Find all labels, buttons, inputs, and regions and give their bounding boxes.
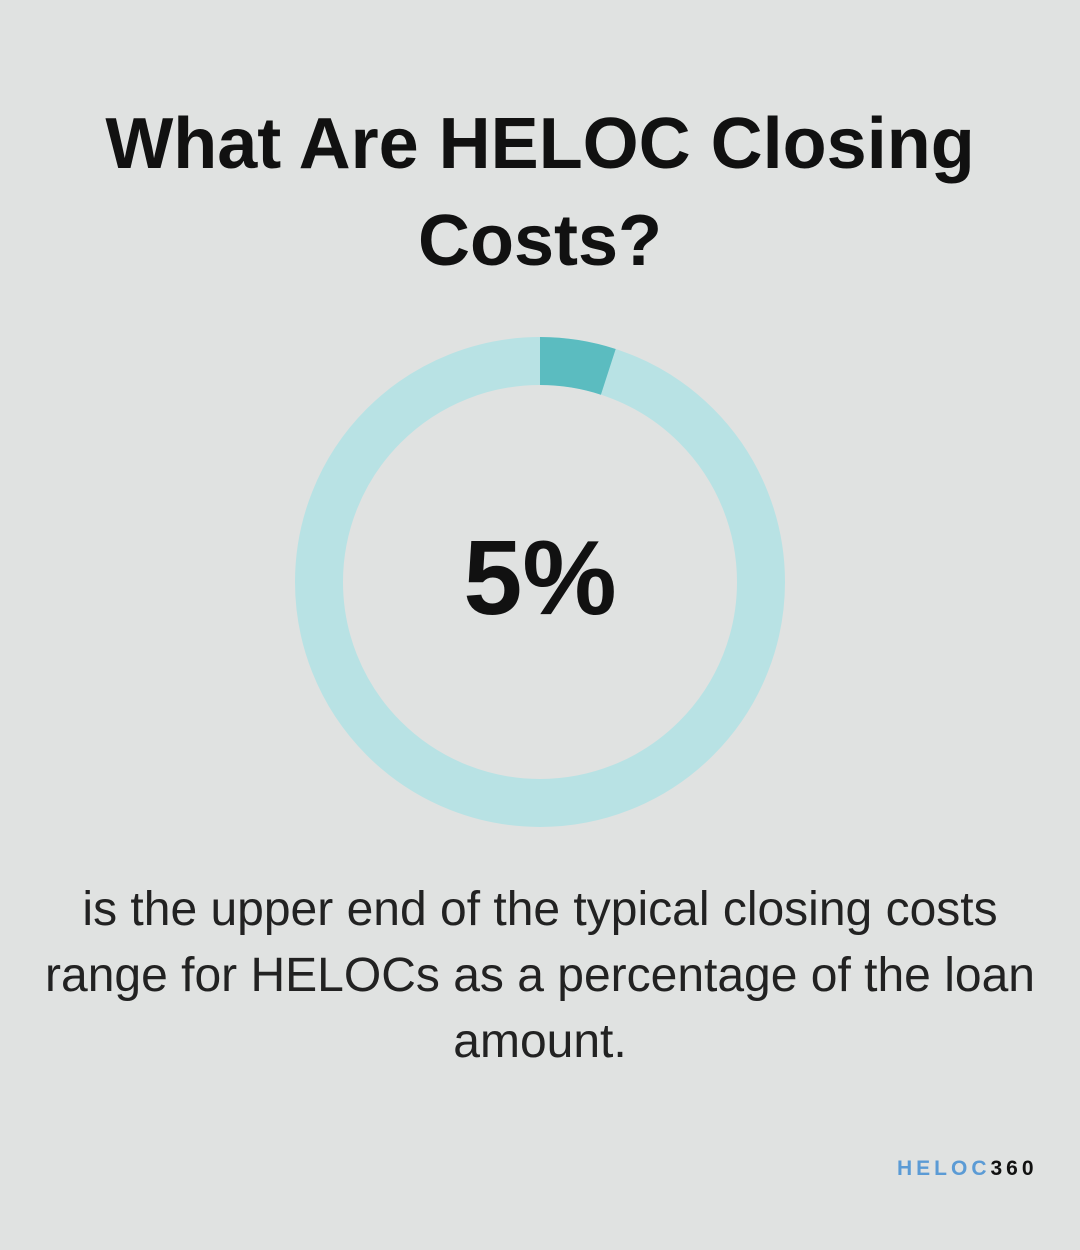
title: What Are HELOC Closing <box>105 104 975 184</box>
description: amount. <box>453 1015 627 1068</box>
description <box>45 883 1035 1068</box>
logo: HELOC360 <box>897 1157 1038 1180</box>
title <box>105 104 975 281</box>
title: Costs? <box>418 201 662 281</box>
description: is the upper end of the typical closing costs <box>82 883 998 936</box>
donut chart: 5% <box>463 519 617 637</box>
description: range for HELOCs as a percentage of the loan <box>45 949 1035 1002</box>
